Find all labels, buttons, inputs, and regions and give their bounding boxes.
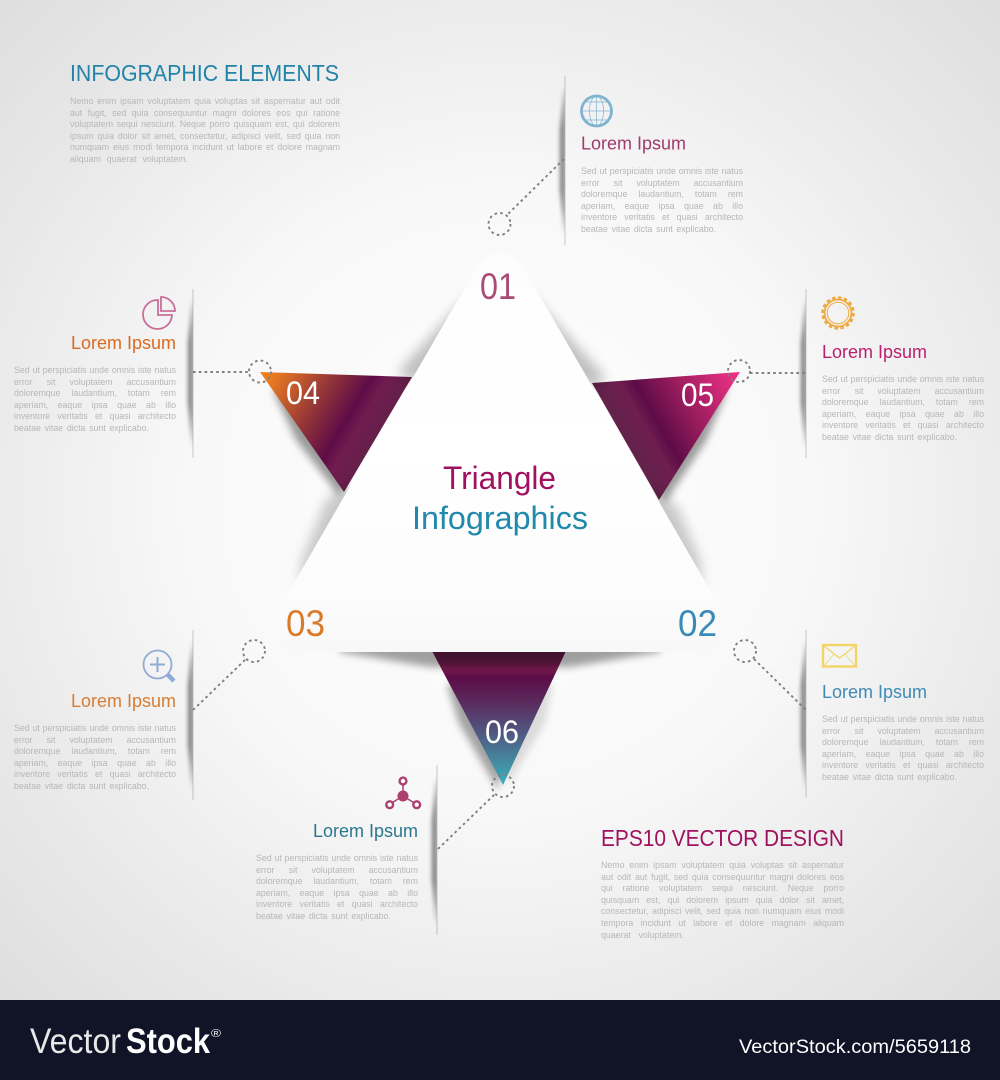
text 02 [822, 714, 985, 786]
text 03: aperiam, eaque ipsa quae ab illo [14, 758, 176, 768]
text 02: inventore veritatis et quasi architecto [822, 760, 984, 770]
footer logo: Stock [126, 1022, 210, 1061]
text block: eps10: Nemo enim ipsam voluptatem quia voluptas sit aspernatur [601, 860, 844, 870]
connector 06 [438, 775, 514, 849]
connector 02 [734, 640, 806, 710]
icon: globe [582, 96, 612, 126]
footer logo [30, 1022, 221, 1061]
text 03: doloremque laudantium, totam rem [14, 746, 176, 756]
number 01: 01 [480, 266, 516, 307]
heading 02: Lorem Ipsum [822, 682, 927, 702]
text 06: error sit voluptatem accusantium [256, 865, 418, 875]
text 04: Sed ut perspiciatis unde omnis iste natus [14, 365, 176, 375]
panel 01: top [488, 76, 744, 245]
text 05: Sed ut perspiciatis unde omnis iste natus [822, 374, 984, 384]
center title [412, 460, 588, 536]
heading 06: Lorem Ipsum [313, 821, 418, 841]
text 02: error sit voluptatem accusantium [822, 726, 984, 736]
icon: pie chart [143, 297, 175, 329]
connector 04 [193, 360, 271, 382]
footer logo: Vector [30, 1022, 121, 1061]
number 02: 02 [678, 603, 717, 644]
text 06 [256, 853, 419, 925]
text 04: aperiam, eaque ipsa quae ab illo [14, 400, 176, 410]
heading 03: Lorem Ipsum [71, 691, 176, 711]
text block: eps10: aut odit aut fugit, sed quia consequuntur magni dolores eos [601, 872, 844, 882]
text block: intro: ipsum quia dolor sit amet, consectetur, adipisci velit, sed quia non [70, 131, 340, 141]
triangle 04 [260, 372, 412, 497]
connector 01 [488, 159, 564, 235]
center title: Infographics [412, 500, 588, 536]
heading 04: Lorem Ipsum [71, 333, 176, 353]
center title: Triangle [443, 460, 556, 496]
text 02: beatae vitae dicta sunt explicabo. [822, 772, 957, 782]
text block: eps10: qui ratione voluptatem sequi nesciunt. Neque porro [601, 883, 844, 893]
icon: envelope [823, 645, 856, 666]
text 06: doloremque laudantium, totam rem [256, 876, 418, 886]
text 05: inventore veritatis et quasi architecto [822, 420, 984, 430]
text 03: beatae vitae dicta sunt explicabo. [14, 781, 149, 791]
connector 03 [193, 640, 265, 710]
text block: eps10: quisquam est, qui dolorem ipsum quia dolor sit amet, [601, 895, 844, 905]
text block: eps10 [601, 860, 845, 944]
triangle 06: 06 [485, 714, 519, 750]
text 03: inventore veritatis et quasi architecto [14, 769, 176, 779]
text 05: beatae vitae dicta sunt explicabo. [822, 432, 957, 442]
triangle 06 [432, 651, 566, 790]
icon: molecule [386, 778, 420, 808]
panel 02: right bottom [734, 630, 985, 797]
text 04: beatae vitae dicta sunt explicabo. [14, 423, 149, 433]
text 03: error sit voluptatem accusantium [14, 735, 176, 745]
panel 06: bottom center [256, 765, 514, 935]
text block: intro: aliquam quaerat voluptatem. [70, 154, 188, 164]
icon: gear [823, 298, 853, 328]
text 01 [581, 166, 744, 238]
text block: eps10: tempora incidunt ut labore et dolore magnam aliquam [601, 918, 844, 928]
text block: intro: Nemo enim ipsam voluptatem quia voluptas sit aspernatur aut odit [70, 96, 340, 106]
text 04 [14, 365, 177, 437]
text block: eps10: quaerat voluptatem. [601, 930, 684, 940]
text 01: inventore veritatis et quasi architecto [581, 212, 743, 222]
heading: eps10 vector design: EPS10 VECTOR DESIGN [601, 825, 844, 851]
text 04: doloremque laudantium, totam rem [14, 388, 176, 398]
text block: intro: aut fugit, sed quia consequuntur magni dolores eos qui ratione [70, 108, 340, 118]
text 01: beatae vitae dicta sunt explicabo. [581, 224, 716, 234]
footer logo: ® [211, 1028, 221, 1040]
triangle 05: 05 [681, 377, 714, 413]
text 05: aperiam, eaque ipsa quae ab illo [822, 409, 984, 419]
icon: magnifier [144, 650, 174, 681]
triangle 04: 04 [286, 375, 320, 411]
text 01: Sed ut perspiciatis unde omnis iste natus [581, 166, 743, 176]
text block: intro: voluptatem sequi nesciunt. Neque porro quisquam est, qui dolorem [70, 119, 340, 129]
panel 05: right middle [728, 289, 985, 458]
text block: eps10: consectetur, adipisci velit, sed quia non numquam eius modi [601, 906, 844, 916]
text 03 [14, 723, 177, 795]
text 02: doloremque laudantium, totam rem [822, 737, 984, 747]
panel 04: left middle [14, 289, 271, 458]
text 03: Sed ut perspiciatis unde omnis iste natus [14, 723, 176, 733]
text 02: Sed ut perspiciatis unde omnis iste natus [822, 714, 984, 724]
text 05: error sit voluptatem accusantium [822, 386, 984, 396]
heading: infographic elements: INFOGRAPHIC ELEMENTS [70, 60, 339, 86]
panel 03: left bottom [14, 630, 265, 800]
number 03: 03 [286, 603, 325, 644]
text 04: inventore veritatis et quasi architecto [14, 411, 176, 421]
text 01: error sit voluptatem accusantium [581, 178, 743, 188]
heading 05: Lorem Ipsum [822, 342, 927, 362]
text 05: doloremque laudantium, totam rem [822, 397, 984, 407]
text 06: inventore veritatis et quasi architecto [256, 899, 418, 909]
text 06: Sed ut perspiciatis unde omnis iste natus [256, 853, 418, 863]
triangle 05 [592, 372, 740, 504]
text 06: beatae vitae dicta sunt explicabo. [256, 911, 391, 921]
text block: intro: numquam eius modi tempora incidunt ut labore et dolore magnam [70, 142, 340, 152]
text 04: error sit voluptatem accusantium [14, 377, 176, 387]
text 01: aperiam, eaque ipsa quae ab illo [581, 201, 743, 211]
text 01: doloremque laudantium, totam rem [581, 189, 743, 199]
footer image id: VectorStock.com/5659118 [739, 1037, 971, 1058]
heading 01: Lorem Ipsum [581, 134, 686, 154]
text 05 [822, 374, 985, 446]
text block: intro [70, 96, 341, 168]
text 06: aperiam, eaque ipsa quae ab illo [256, 888, 418, 898]
footer bar [0, 1000, 1000, 1080]
main white triangle [274, 252, 726, 667]
text 02: aperiam, eaque ipsa quae ab illo [822, 749, 984, 759]
connector 05 [728, 360, 806, 382]
